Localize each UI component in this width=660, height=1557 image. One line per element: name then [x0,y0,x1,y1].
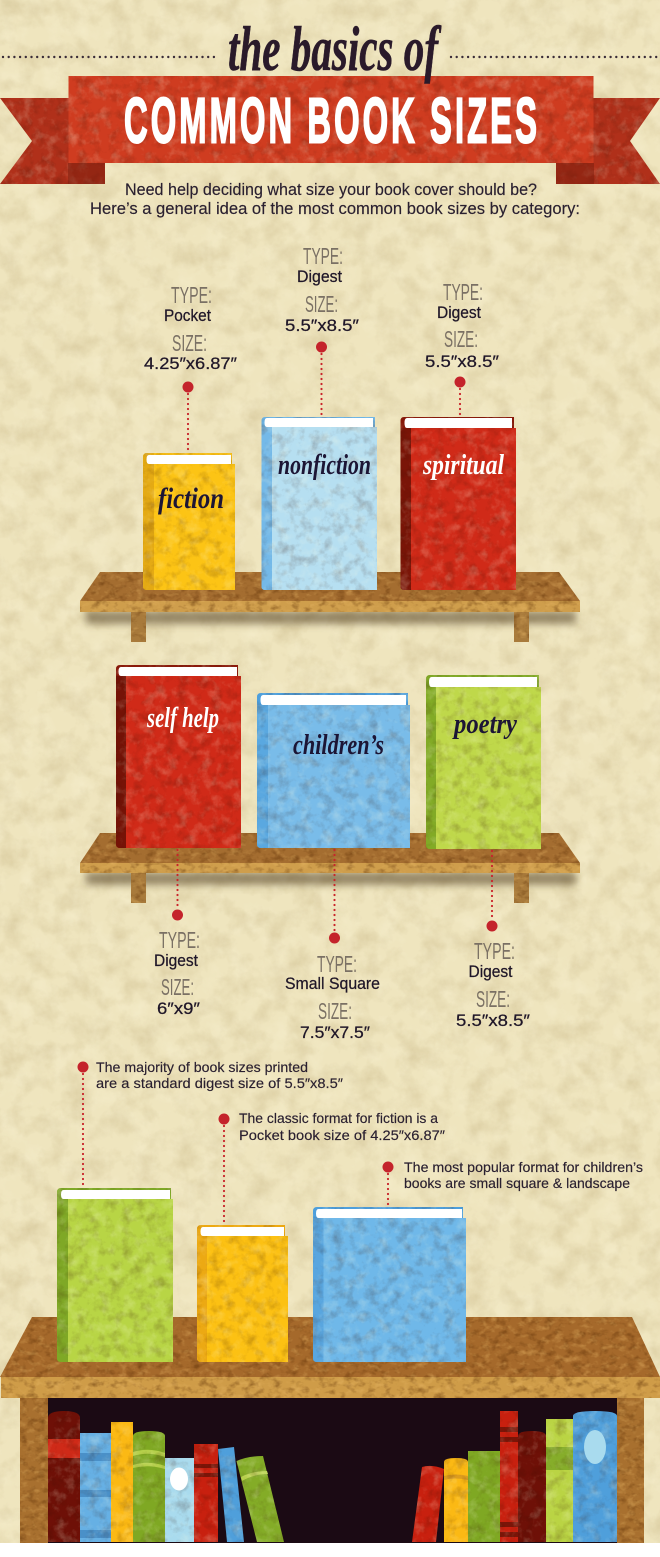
label: children's size: Small Square [285,975,380,993]
shelf one [80,572,580,642]
cabinet top front [1,1377,660,1398]
dotted rule right [451,56,660,58]
label: self help size: Digest [154,952,198,970]
intro text [90,181,580,218]
label: poetry size: Digest [468,963,513,981]
book: nonfiction: nonfiction [278,450,371,481]
shelf two [80,833,580,903]
label: fiction size: SIZE: [172,330,207,356]
book: spiritual: spiritual [422,450,504,481]
ribbon main band [68,76,594,163]
label: children's size: TYPE: [317,951,357,977]
book: large lime [57,1188,173,1362]
label: children's size: SIZE: [318,998,352,1024]
book: children's: children’s [293,730,384,761]
label: fiction size: Pocket [164,307,211,325]
label: children's size [285,850,380,1042]
callout: majority digest [78,1059,343,1186]
spine: light blue [165,1458,194,1542]
cabinet dark interior [48,1398,617,1543]
shelf shadow [86,872,576,885]
spine: blue [80,1433,111,1542]
callout: majority digest: are a standard digest size of 5.5″x8.5″ [96,1075,343,1091]
title script text: the basics of [228,13,442,84]
spine: tilted red [412,1466,444,1542]
shelf surface [80,833,580,863]
label: fiction size: TYPE: [171,282,212,308]
spine: dark red [48,1411,80,1542]
label: nonfiction size: TYPE: [303,243,343,269]
shelf surface [80,572,580,601]
book: large blue [313,1207,466,1362]
callout: majority digest: The majority of book sizes printed [96,1059,308,1075]
ribbon fold shadows [68,163,594,184]
label: self help size: SIZE: [161,974,194,1000]
label: nonfiction size [285,243,359,415]
label: children's size: 7.5″x7.5″ [300,1024,370,1042]
spine: red [194,1444,218,1542]
shelf shadow [86,611,576,624]
callout: classic fiction format: Pocket book size of 4.25″x6.87″ [239,1127,445,1143]
oval label: light blue spine [170,1468,188,1490]
callout: classic fiction format: The classic format for fiction is a [239,1110,438,1126]
callout: children's format: books are small square & landscape [404,1175,630,1191]
brackets [131,612,529,642]
book: self help [116,665,241,848]
shelf front [80,863,580,873]
shelf front [80,601,580,612]
label: self help size: TYPE: [159,927,200,953]
cabinet top surface [0,1317,660,1377]
dotted rule left [3,56,215,58]
cabinet sides [20,1398,644,1543]
label: poetry size: TYPE: [474,938,515,964]
books row: left group [48,1411,284,1542]
callout: children's format: The most popular format for children’s [404,1159,643,1175]
label: poetry size [456,851,530,1030]
spine: green [133,1431,165,1542]
oval label: wide blue spine [584,1430,606,1464]
banner ribbon [0,76,660,184]
books row: right group [412,1411,617,1542]
spine: yellow [111,1422,133,1542]
spine: tilted blue [218,1447,244,1542]
spine: green [468,1451,500,1542]
spine: tall red [500,1411,518,1542]
book: large yellow [197,1225,288,1362]
spine: dark red [518,1431,546,1542]
label: spiritual size [425,279,499,415]
label: poetry size: SIZE: [476,986,510,1012]
label: nonfiction size: 5.5″x8.5″ [285,317,359,335]
intro text: Need help deciding what size your book cover should be? [125,181,537,199]
spine: tilted green [236,1456,284,1542]
ribbon tails [0,98,660,184]
book: fiction: fiction [158,482,224,515]
book: self help: self help [146,703,219,734]
book: fiction [143,453,235,590]
callout: classic fiction format [218,1110,445,1222]
label: spiritual size: SIZE: [444,326,478,352]
spine: yellow [444,1458,468,1542]
book: spiritual [400,417,516,590]
book: poetry [426,675,541,849]
intro text: Here’s a general idea of the most common book sizes by category: [90,200,580,218]
label: spiritual size: 5.5″x8.5″ [425,353,499,371]
spine band: red [48,1439,80,1458]
label: nonfiction size: Digest [297,268,342,286]
label: fiction size [144,282,237,451]
title: the basics of [3,56,660,58]
book: children's [257,693,410,848]
label: self help size [154,850,200,1018]
book: nonfiction [262,417,377,590]
spine: wide blue [573,1411,617,1542]
spine: lime [546,1419,573,1542]
callout: children's format [382,1159,643,1205]
bookcase [0,1317,660,1543]
label: spiritual size: TYPE: [443,279,483,305]
label: poetry size: 5.5″x8.5″ [456,1012,530,1030]
brackets [131,873,529,903]
label: fiction size: 4.25″x6.87″ [144,355,237,373]
book: poetry: poetry [452,709,518,740]
label: nonfiction size: SIZE: [305,291,338,317]
label: spiritual size: Digest [437,304,481,322]
label: self help size: 6″x9″ [157,1000,200,1018]
